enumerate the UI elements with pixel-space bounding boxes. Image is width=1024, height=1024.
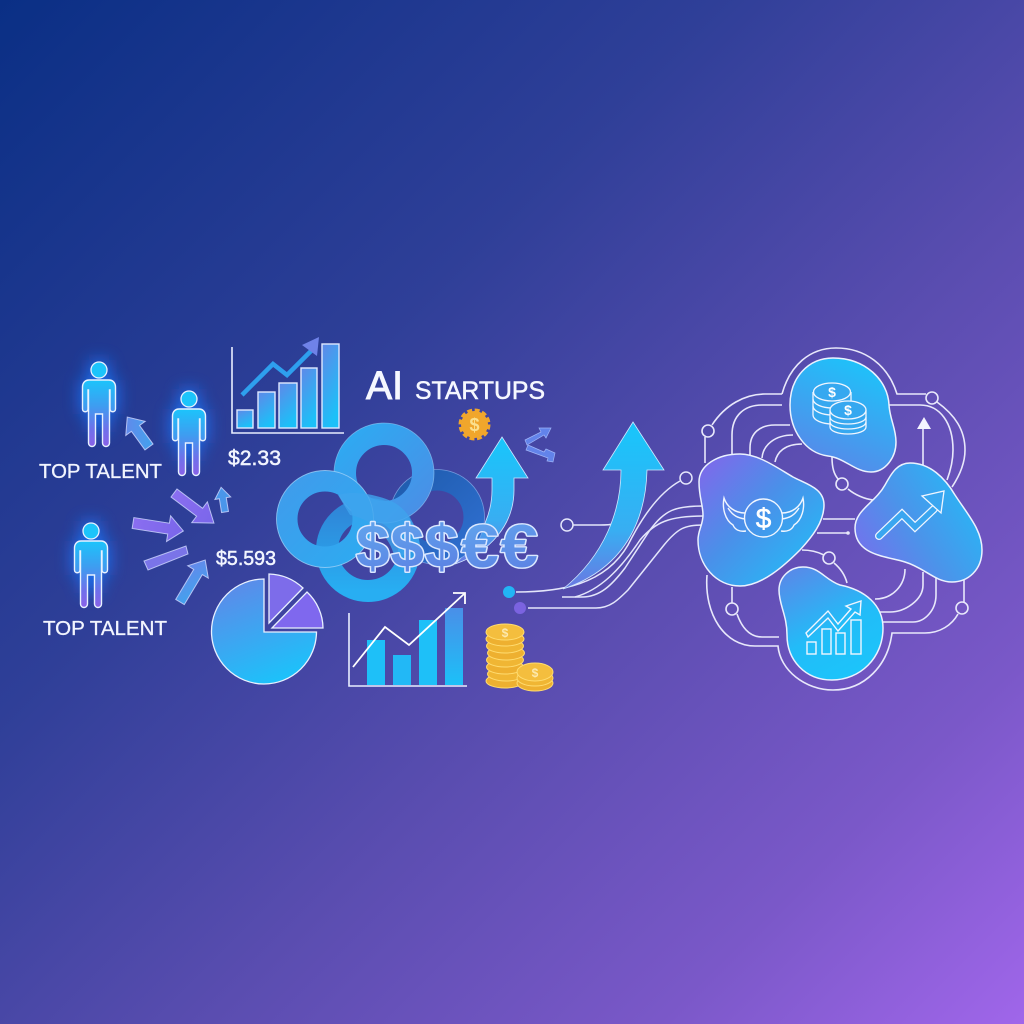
panel: hub blob with winged dollar <box>698 454 824 586</box>
currency: dollars: $$$ <box>356 513 458 580</box>
icon: coin stacks: $ <box>828 384 836 400</box>
icon: coin stacks: $ <box>844 402 852 418</box>
arrow: up right <box>170 554 216 608</box>
dots: flow origins <box>503 586 526 614</box>
arrow: centre upward <box>455 437 528 564</box>
icon: winged dollar: $ <box>756 503 772 534</box>
arrow: up left <box>118 410 159 454</box>
currency: euros: €€ <box>461 513 538 580</box>
circuit lines: flow to hub <box>516 472 703 608</box>
icon: interlocking rings <box>276 423 484 591</box>
icon: person lower <box>72 521 110 608</box>
panel: coins blob <box>790 358 896 472</box>
icon: zigzag arrow <box>879 491 944 536</box>
bar chart: bottom <box>349 593 467 686</box>
arrow: small up <box>213 486 233 513</box>
arrow: large upward <box>563 422 664 589</box>
currency: euros: €€ <box>461 513 538 580</box>
panel: growth arrow blob <box>855 463 982 582</box>
label: top talent upper: TOP TALENT <box>39 460 162 483</box>
arrow: down right <box>166 483 222 533</box>
arrow: plain bar <box>144 546 188 570</box>
arrow: right <box>131 510 185 544</box>
pie chart <box>212 574 323 684</box>
panel: talent <box>39 360 208 640</box>
currency: dollars: $$$ <box>356 513 458 580</box>
currency symbols <box>356 513 538 580</box>
icon: person top right <box>170 389 208 476</box>
title: STARTUPS: STARTUPS <box>415 377 545 405</box>
icon: coin stacks <box>813 383 866 434</box>
panel: chart blob <box>779 567 883 680</box>
arrows: small pair <box>525 428 555 462</box>
icon: gold gear coin <box>460 410 489 439</box>
circuit network <box>702 348 968 690</box>
icon: person top left <box>80 360 118 446</box>
icon: bars with trend <box>806 601 861 654</box>
icon: gold gear coin: $ <box>469 415 480 435</box>
title <box>366 364 545 408</box>
panel: arrows <box>118 410 233 608</box>
label: $2.33: $2.33 <box>228 447 281 470</box>
label: $5.593: $5.593 <box>216 548 276 570</box>
bar chart: top <box>232 337 344 433</box>
icon: gold coins stack: $ <box>502 626 509 640</box>
icon: gold coins stack: $ <box>532 666 539 680</box>
title: AI: AI <box>366 364 403 408</box>
label: top talent lower: TOP TALENT <box>43 617 167 640</box>
icon: gold coins stack <box>486 624 553 691</box>
